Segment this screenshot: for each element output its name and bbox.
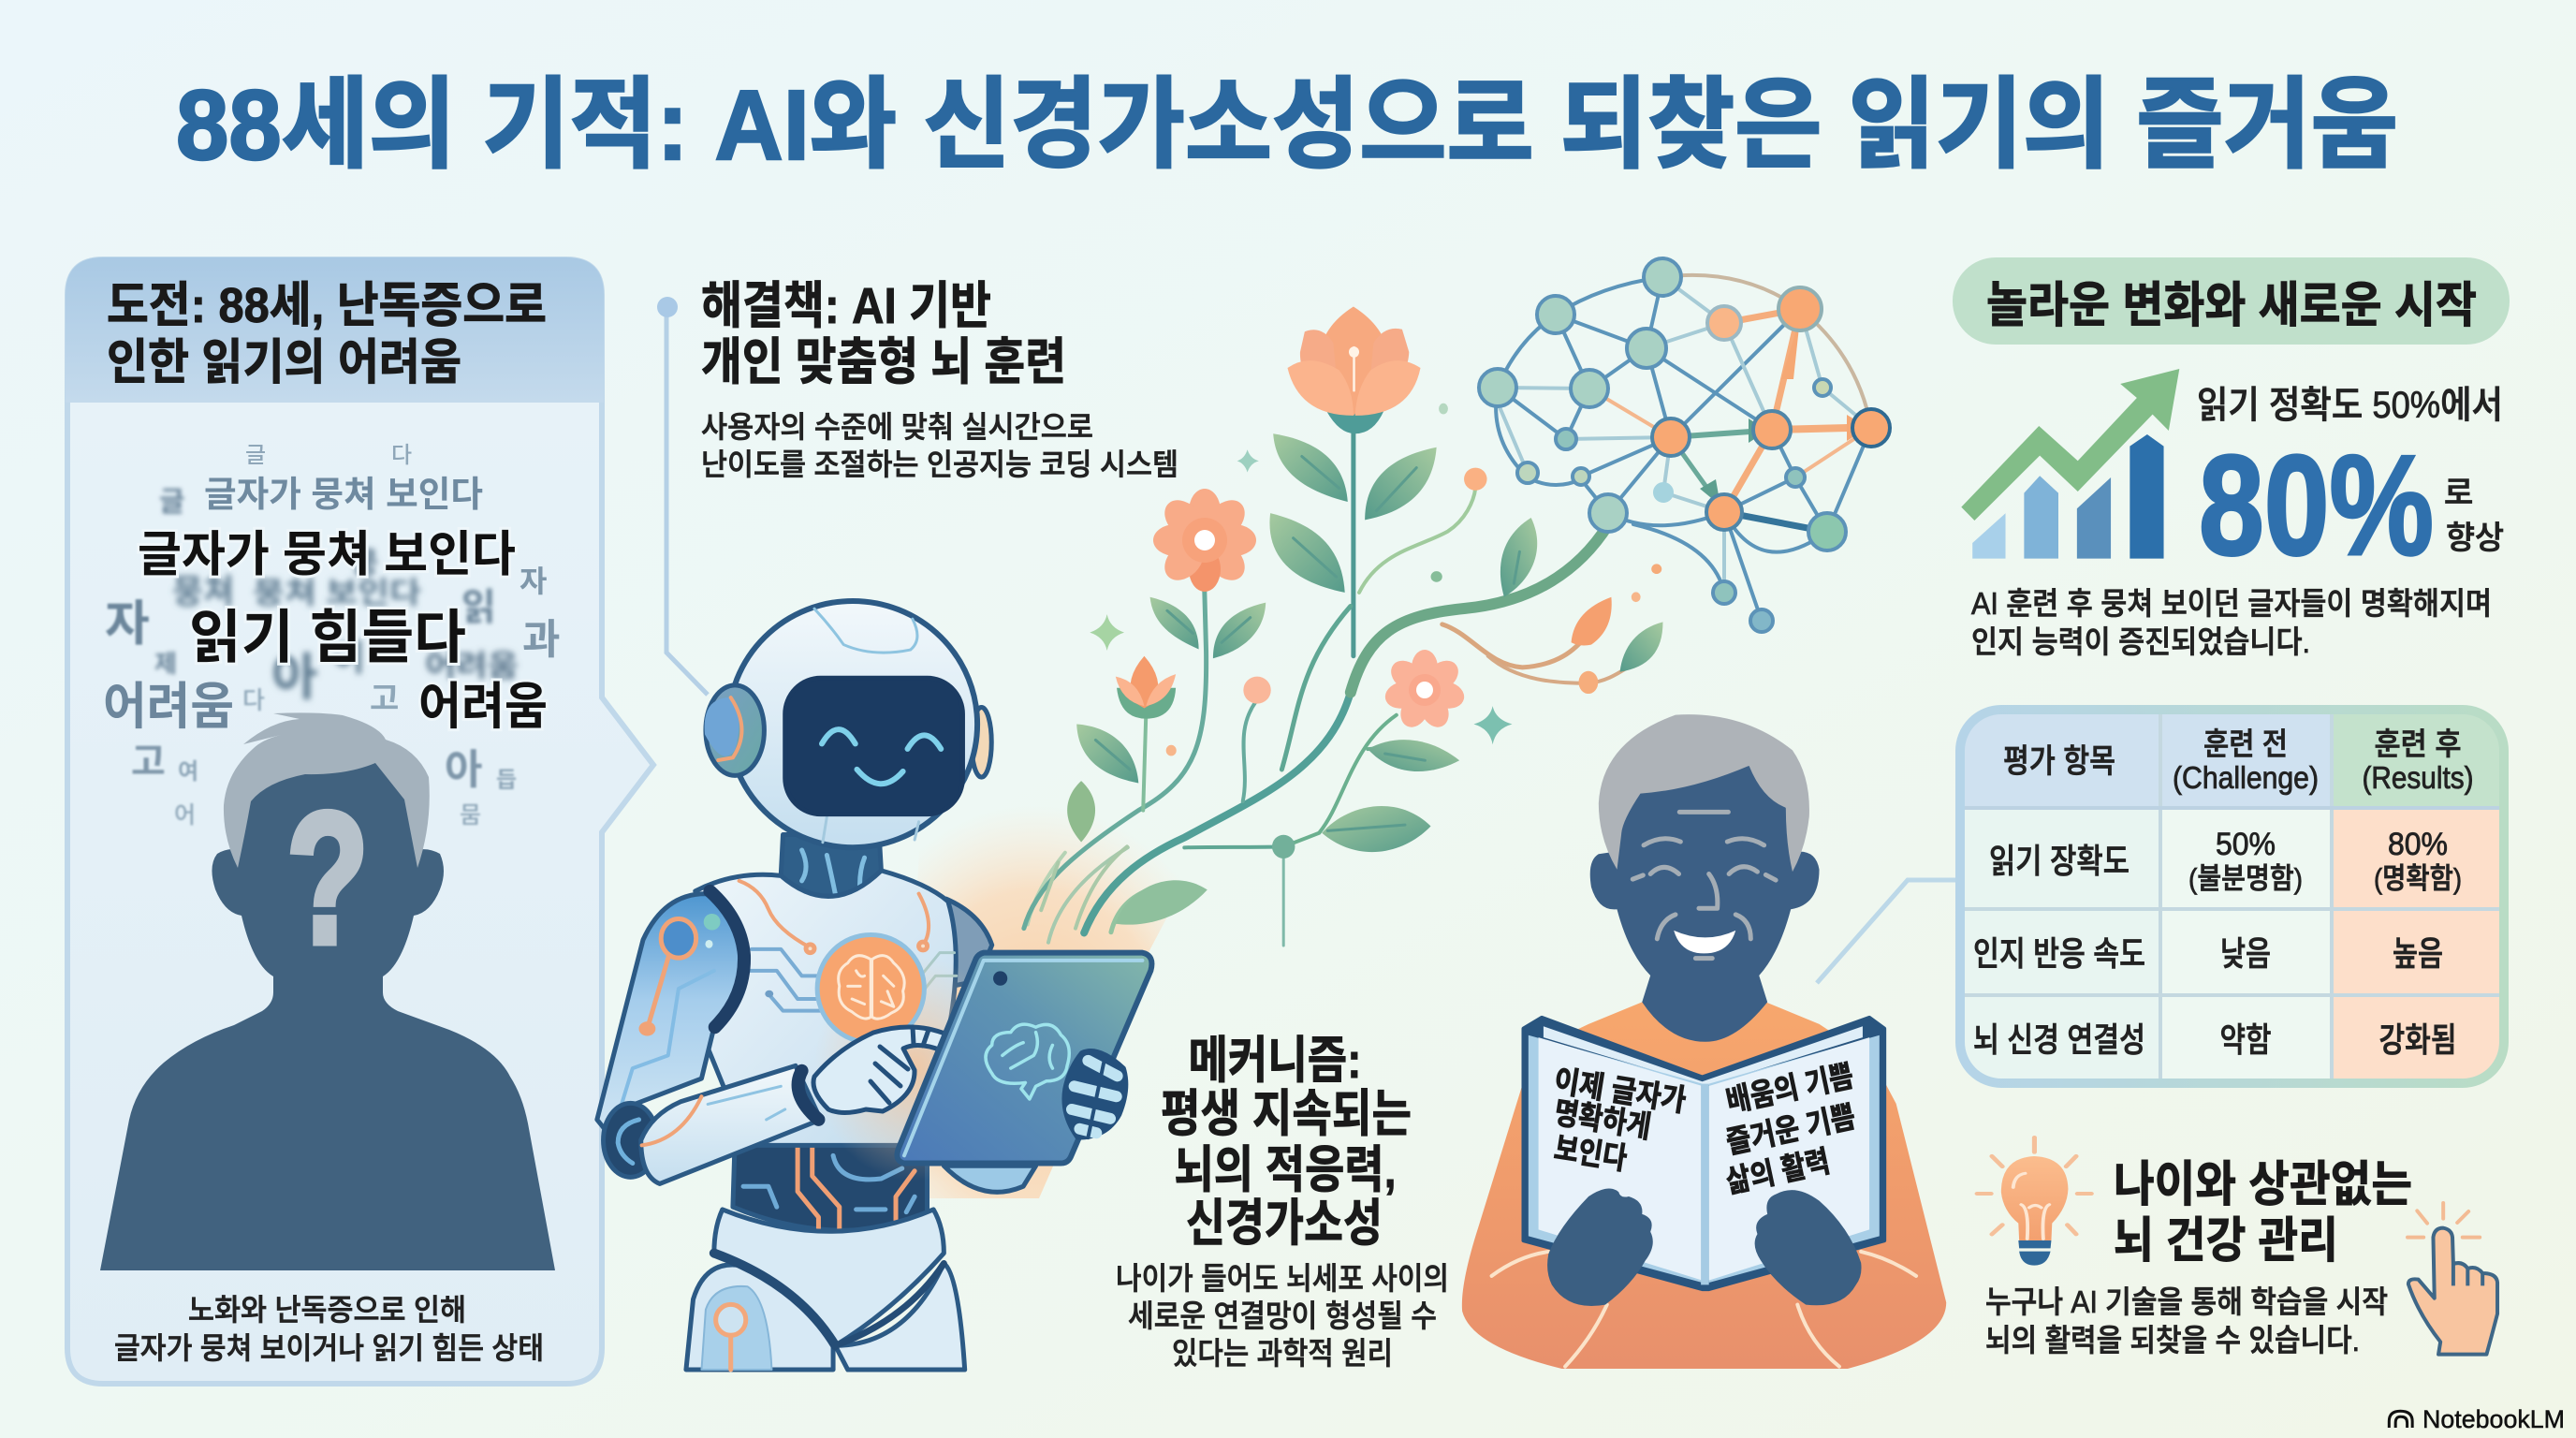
mechanism text: 있다는 과학적 원리: [1172, 1336, 1393, 1371]
blurred letters cloud: 아: [445, 747, 482, 793]
accuracy stat: [1971, 385, 2504, 659]
solution heading and callout: 난이도를 조절하는 인공지능 코딩 시스템: [701, 448, 1178, 481]
brain health text: 나이와 상관없는: [2114, 1158, 2412, 1212]
challenge heading: 도전: 88세, 난독증으로: [107, 279, 547, 333]
brain health text: [1985, 1158, 2412, 1357]
robot elbow: [604, 1103, 658, 1177]
table text: 평가 항목: [2003, 743, 2115, 780]
challenge heading: [107, 279, 547, 390]
connector to table: [1817, 880, 1955, 983]
blurred letters cloud: 뭉쳐 보인다: [253, 576, 421, 609]
nodes: [1479, 258, 1890, 632]
table text: 높음: [2393, 934, 2443, 973]
head: [1590, 766, 1820, 1042]
torso glow: [814, 955, 1015, 1181]
table text: 50%: [2216, 827, 2276, 862]
elderly man reading: [1462, 714, 1946, 1369]
book text: [1552, 1058, 1858, 1199]
table text: (Challenge): [2173, 760, 2319, 795]
blurred letters cloud: 여: [178, 759, 198, 785]
blurred letters cloud: 글자가 뭉쳐 보인다: [204, 476, 483, 515]
robot ear: [706, 685, 764, 775]
flower two: [1153, 489, 1256, 592]
NotebookLM watermark: NotebookLM: [2422, 1405, 2565, 1433]
table text: 훈련 후: [2374, 726, 2462, 761]
bud dots: [1464, 468, 1487, 491]
brain health text: 누구나 AI 기술을 통해 학습을 시작: [1985, 1284, 2388, 1319]
bud: [1572, 597, 1612, 645]
robot neck: [781, 835, 881, 896]
blurred letters cloud: 다: [242, 686, 265, 714]
table text: 약함: [2220, 1020, 2271, 1059]
blurred letters cloud: 어려움: [425, 649, 519, 682]
robot: [597, 601, 1151, 1370]
accuracy stat: 로: [2444, 476, 2473, 511]
blurred letters cloud: 어려움: [103, 679, 234, 735]
table text: (Results): [2363, 760, 2473, 795]
plant illustration: [1024, 307, 1662, 946]
robot hip: [714, 1210, 944, 1345]
mechanism text: 평생 지속되는: [1161, 1086, 1412, 1142]
accuracy stat: 인지 능력이 증진되었습니다.: [1971, 624, 2310, 659]
accuracy stat: 80%: [2199, 426, 2434, 585]
arrow heads: [1781, 318, 1868, 441]
flower three: [1383, 650, 1467, 732]
bold words: [138, 528, 548, 735]
growth chart icon: [1961, 369, 2179, 559]
brain health text: 뇌의 활력을 되찾을 수 있습니다.: [1985, 1323, 2360, 1357]
blurred letters cloud: 자: [520, 565, 547, 598]
blurred letters cloud: 이: [332, 639, 365, 679]
table text: 인지 반응 속도: [1973, 934, 2145, 973]
chest brain: [817, 934, 924, 1043]
results pill heading: [1953, 257, 2510, 345]
blurred letters cloud: [103, 443, 560, 829]
table text: 강화됨: [2379, 1020, 2456, 1059]
solution heading and callout: 해결책: AI 기반: [701, 278, 991, 334]
hands: [1547, 1188, 1653, 1306]
orange glow: [899, 805, 1226, 1198]
robot legs: [686, 1264, 965, 1370]
bold words: 글자가 뭉쳐 보인다: [138, 528, 516, 582]
blurred letters cloud: 고: [370, 682, 399, 717]
icon: pointing hand: [2408, 1203, 2497, 1355]
panel header: [66, 257, 604, 403]
blurred letters cloud: 아: [271, 650, 318, 706]
icon: light bulb: [1977, 1137, 2091, 1266]
blurred letters cloud: 뭉: [351, 546, 378, 580]
mechanism text: [1116, 1033, 1449, 1371]
robot waist: [733, 1140, 928, 1235]
challenge heading: 인한 읽기의 어려움: [107, 336, 461, 390]
bold words: 어려움: [418, 679, 548, 735]
blurred letters cloud: 읽: [461, 587, 496, 628]
sparkles: [1237, 449, 1259, 472]
stems: [1084, 693, 1351, 932]
table text: 낮음: [2220, 934, 2271, 973]
book text: 명확하게: [1552, 1094, 1653, 1144]
table text: (명확함): [2374, 862, 2462, 895]
question mark: ?: [286, 774, 369, 983]
silhouette: [100, 712, 555, 1270]
robot tablet: [944, 1166, 1036, 1192]
robot upper arm: [597, 891, 744, 1130]
lower stem strands: [1028, 847, 1153, 943]
small tulip: [1117, 688, 1176, 719]
robot pointing hand: [813, 1027, 947, 1112]
title: 88세의 기적: AI와 신경가소성으로 되찾은 읽기의 즐거움: [176, 70, 2398, 181]
blurred letters cloud: 뭄: [460, 802, 481, 829]
blurred letters cloud: 자: [105, 597, 150, 652]
panel: challenge: [66, 257, 653, 1384]
challenge caption: 노화와 난독증으로 인해: [188, 1293, 466, 1327]
back shoulder: [946, 899, 992, 986]
tablet face: [897, 953, 1151, 1164]
body: [1462, 1002, 1946, 1369]
blurred letters cloud: 글: [159, 487, 185, 518]
book text: 보인다: [1552, 1130, 1630, 1176]
book text: 배움의 기쁨: [1723, 1058, 1856, 1119]
table text: 뇌 신경 연결성: [1973, 1020, 2145, 1059]
blurred letters cloud: 어: [174, 802, 196, 829]
book text: 즐거운 기쁨: [1723, 1099, 1858, 1160]
blurred letters cloud: 다: [391, 443, 412, 468]
blurred letters cloud: 뭉쳐: [172, 572, 234, 610]
solution heading and callout: 사용자의 수준에 맞춰 실시간으로: [701, 410, 1093, 444]
leaves: [1273, 433, 1348, 502]
brain health text: 뇌 건강 관리: [2114, 1214, 2338, 1269]
table text: 훈련 전: [2203, 726, 2288, 761]
mechanism text: 세로운 연결망이 형성될 수: [1128, 1299, 1437, 1333]
accuracy stat: 읽기 정확도 50%에서: [2197, 385, 2503, 426]
table text: 읽기 장확도: [1989, 842, 2130, 880]
blurred letters cloud: 글: [245, 443, 266, 468]
robot torso: [695, 871, 1015, 1181]
challenge caption: [114, 1293, 544, 1365]
blurred letters cloud: 제: [154, 650, 177, 678]
leaf veins: [1095, 457, 1519, 830]
central flower: [1326, 411, 1383, 433]
robot head: [705, 601, 991, 847]
bold words: 읽기 힘들다: [189, 606, 466, 670]
blurred letters cloud: 과: [522, 617, 560, 663]
mechanism text: 나이가 들어도 뇌세포 사이의: [1116, 1261, 1449, 1296]
book text: 이제 글자가: [1552, 1063, 1689, 1118]
table text: [1973, 726, 2473, 1059]
blurred letters cloud: 듭: [496, 768, 517, 793]
table text: 80%: [2388, 827, 2448, 862]
robot forearm: [641, 1065, 821, 1183]
solution heading and callout: 개인 맞춤형 뇌 훈련: [701, 334, 1066, 390]
book text: 삶의 활력: [1723, 1143, 1833, 1199]
book: [1523, 1018, 1884, 1289]
results pill heading: 놀라운 변화와 새로운 시작: [1986, 279, 2477, 333]
blurred letters cloud: 고: [131, 741, 166, 783]
neural network brain: [1479, 258, 1890, 632]
comparison table: [1960, 710, 2504, 1083]
challenge caption: 글자가 뭉쳐 보이거나 읽기 힘든 상태: [114, 1331, 544, 1365]
solution heading and callout: [657, 278, 1178, 695]
accuracy stat: AI 훈련 후 뭉쳐 보이던 글자들이 명확해지며: [1971, 586, 2492, 621]
accuracy stat: 향상: [2446, 521, 2504, 556]
mechanism text: 메커니즘:: [1189, 1033, 1361, 1089]
mechanism text: 뇌의 적응력,: [1174, 1142, 1397, 1198]
table text: (불분명함): [2188, 862, 2303, 895]
mechanism text: 신경가소성: [1186, 1196, 1383, 1252]
